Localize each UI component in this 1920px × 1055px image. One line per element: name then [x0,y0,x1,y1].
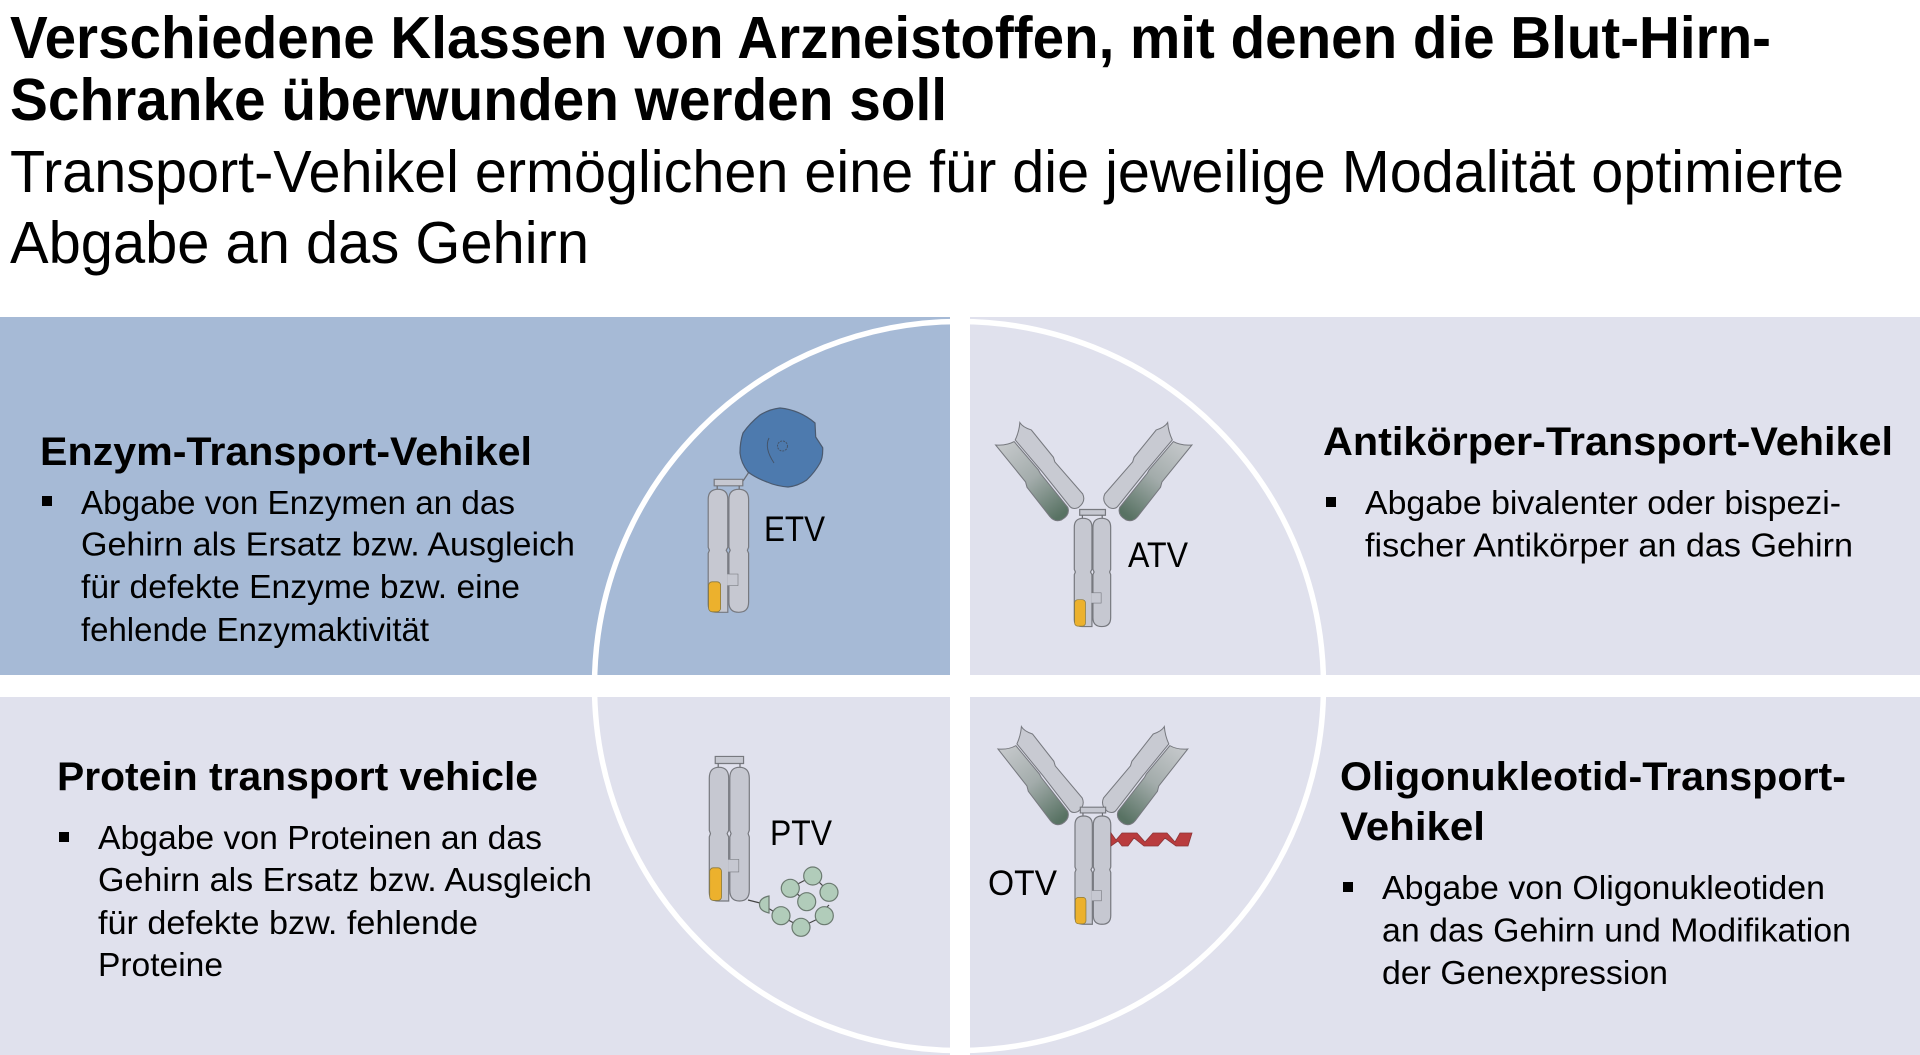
text block: Enzym-Transport-Vehikel: für defekte Enzyme bzw. eine [81,568,520,605]
subtitle: Abgabe an das Gehirn [10,210,589,276]
subtitle: Transport-Vehikel ermöglichen eine für die jeweilige Modalität optimierte [10,139,1844,205]
text block: Antikörper-Transport-Vehikel: Antikörper-Transport-Vehikel [1323,420,1893,464]
icon: ATV antibody [996,423,1192,627]
icon: protein domain half disc [760,896,769,913]
text block: Protein transport vehicle: Proteine [98,946,223,983]
text block: Protein transport vehicle: für defekte bzw. fehlende [98,904,478,941]
icon: ETV molecule [708,408,823,612]
panel: antibody transport vehicle background [970,317,1920,675]
text block: Enzym-Transport-Vehikel: Gehirn als Ersatz bzw. Ausgleich [81,526,575,562]
text block: Enzym-Transport-Vehikel: fehlende Enzymaktivität [81,611,429,648]
text block: Oligonukleotid-Transport-Vehikel: der Genexpression [1382,954,1668,991]
icon: protein beads [772,867,838,936]
text block: Oligonukleotid-Transport-Vehikel: Vehikel [1340,805,1485,849]
label: ATV: ATV [1128,535,1188,575]
text block: Enzym-Transport-Vehikel: Abgabe von Enzymen an das [81,484,515,521]
text block: Protein transport vehicle [57,755,592,983]
text block: Protein transport vehicle: Protein transport vehicle [57,755,538,799]
text block: Enzym-Transport-Vehikel [40,430,575,648]
text block: Antikörper-Transport-Vehikel [1323,420,1893,564]
subtitle [10,139,1844,276]
title [10,5,1771,133]
cross gap over circle [590,310,1330,1055]
label: PTV: PTV [770,813,832,853]
text block: Protein transport vehicle: Abgabe von Proteinen an das [98,819,542,856]
icon: OTV antibody with oligonucleotide [998,727,1192,924]
central white circle [594,322,1324,1050]
icon: red oligonucleotide ribbon [1111,833,1192,846]
text block: Protein transport vehicle: Gehirn als Ersatz bzw. Ausgleich [98,861,592,898]
panel: enzyme transport vehicle background [0,317,950,675]
icon: PTV molecule [709,756,838,936]
text block: Enzym-Transport-Vehikel: Enzym-Transport-Vehikel [40,430,532,474]
label: ETV: ETV [764,509,825,549]
text block: Antikörper-Transport-Vehikel: fischer Antikörper an das Gehirn [1365,526,1853,564]
title: Schranke überwunden werden soll [10,67,947,133]
panel: oligonucleotide transport vehicle background [970,697,1920,1055]
title: Verschiedene Klassen von Arzneistoffen, mit denen die Blut-Hirn- [10,5,1771,71]
label: OTV: OTV [988,863,1057,903]
icon: enzyme blob [740,408,823,487]
text block: Oligonukleotid-Transport-Vehikel: Oligonukleotid-Transport- [1340,755,1846,799]
text block: Oligonukleotid-Transport-Vehikel: an das Gehirn und Modifikation [1382,912,1851,948]
panel: protein transport vehicle background [0,697,950,1055]
text block: Oligonukleotid-Transport-Vehikel [1340,755,1851,991]
text block: Antikörper-Transport-Vehikel: Abgabe bivalenter oder bispezi- [1365,484,1841,521]
text block: Oligonukleotid-Transport-Vehikel: Abgabe von Oligonukleotiden [1382,869,1825,906]
